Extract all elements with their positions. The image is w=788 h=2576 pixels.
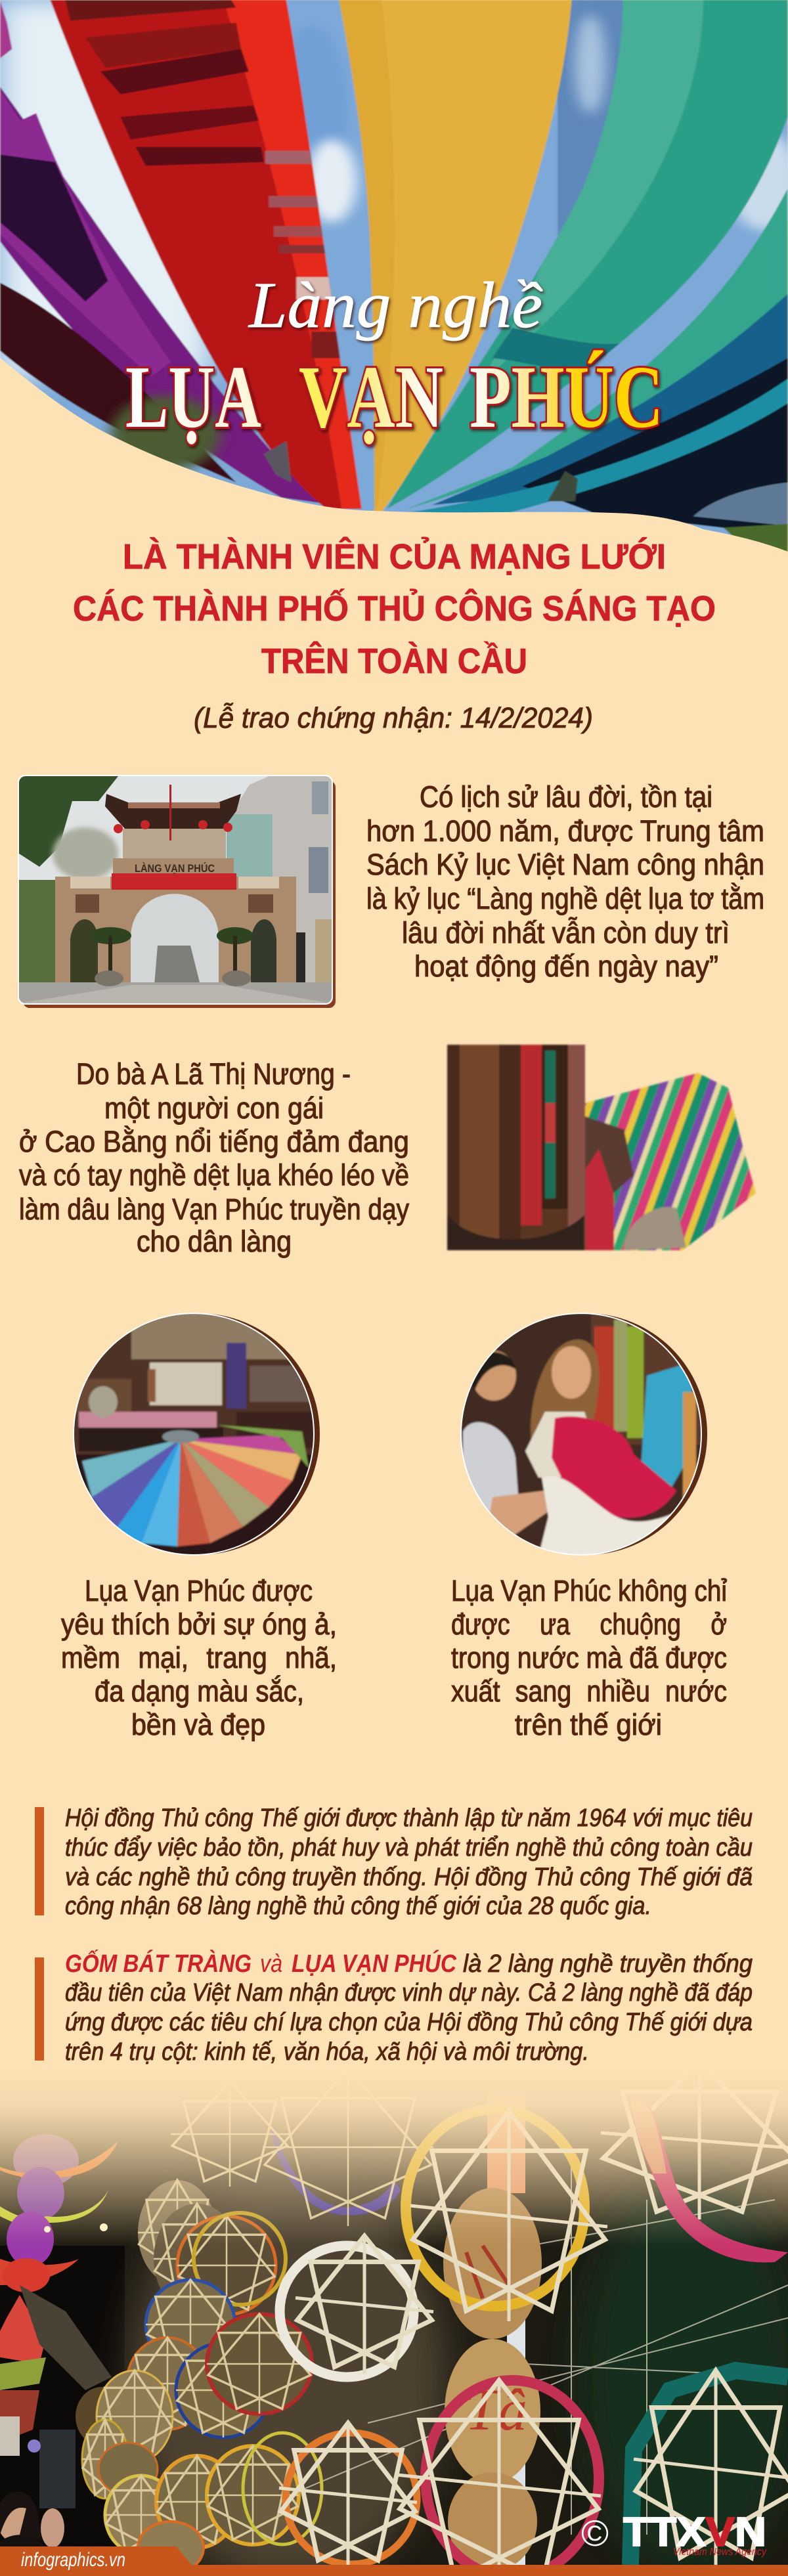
text: founder of the craft: một người con gái [104,1091,324,1125]
photo: Vạn Phúc village gate: LÀNG VẠN PHÚC [135,862,215,875]
pink silk hank [630,2098,788,2263]
red ribbon [50,0,362,509]
shop lights and passer-by [0,2416,76,2546]
lower-right ribbons [407,188,788,509]
note: Bát Tràng and Vạn Phúc recognised: và [260,1950,282,1978]
photo: customers choosing silk [460,1313,707,1557]
photo: Vạn Phúc village gate [18,775,336,1008]
crimson silk star frame [397,2380,601,2576]
hero photo: silk ribbons against the sky [0,0,788,565]
text: domestic and export popularity: Lụa Vạn Phúc không chỉ [451,1574,727,1607]
text: history of the village: lâu đời nhất vẫn còn duy trì [402,916,730,950]
red silk cloth [552,1416,676,1517]
note: Bát Tràng and Vạn Phúc recognised: trên 4 trụ cột: kinh tế, văn hóa, xã hội và môi trường. [65,2038,589,2066]
title line: Lụa Vạn Phúc [125,348,663,447]
basket trays [443,2188,542,2571]
title line: Làng nghề: Làng nghề [248,269,543,341]
basket trays: Tâ [465,2378,527,2443]
bottom orange bar with source tab [0,2546,788,2576]
text: qualities of Vạn Phúc silk: mềm mại, trang nhã, [61,1641,337,1674]
text: qualities of Vạn Phúc silk: đa dạng màu sắc, [95,1674,304,1708]
note: Bát Tràng and Vạn Phúc recognised: là 2 làng nghề truyền thống [463,1950,753,1978]
yellow ribbon [339,0,572,512]
teal silk star frame [630,2370,788,2567]
title line: Lụa Vạn Phúc: VẠN [299,348,443,447]
note: World Crafts Council: công nhận 68 làng nghề thủ công thế giới của 28 quốc gia. [65,1892,651,1920]
text: history of the village: hơn 1.000 năm, được Trung tâm [366,814,764,848]
green ribbon upper [387,0,788,509]
text: history of the village: hoạt động đến ngày nay” [414,950,718,983]
tree trunk [20,2285,112,2390]
note: Bát Tràng and Vạn Phúc recognised [35,1948,753,2066]
text: history of the village [366,780,764,983]
gate arches [131,894,219,988]
right-side buildings [227,776,332,1003]
white silk cloth [539,1476,671,1554]
note: World Crafts Council: và các nghề thủ công truyền thống. Hội đồng Thủ công Thế giới đã [65,1864,753,1891]
text: domestic and export popularity [451,1574,727,1741]
text: founder of the craft: và có tay nghề dệt lụa khéo léo về [19,1158,409,1192]
white silk star frame [280,2236,433,2377]
dark maroon ribbon [0,282,236,483]
heading: CÁC THÀNH PHỐ THỦ CÔNG SÁNG TẠO [73,588,716,628]
trees [19,776,118,867]
left purple ribbon [0,87,322,503]
text: history of the village: Có lịch sử lâu đời, tồn tại [420,780,712,814]
text: qualities of Vạn Phúc silk: yêu thích bởi sự óng ả, [61,1607,337,1641]
bottom photo: silk-wound star frames at night [0,2062,788,2576]
text: founder of the craft [19,1057,409,1258]
shopper in striped top [471,1351,516,1401]
text: founder of the craft: Do bà A Lã Thị Nương - [76,1057,351,1091]
upper star frames [263,2105,433,2226]
date note: (Lễ trao chứng nhận: 14/2/2024) [194,702,593,734]
heading: TRÊN TOÀN CẦU [261,641,527,681]
text: domestic and export popularity: trong nước mà đã được [451,1641,727,1674]
heading [73,536,716,681]
text: founder of the craft: cho dân làng [137,1225,292,1258]
note: Bát Tràng and Vạn Phúc recognised: LỤA VẠN PHÚC [292,1949,456,1978]
text: qualities of Vạn Phúc silk: Lụa Vạn Phúc được [85,1574,313,1607]
title line: Lụa Vạn Phúc: LỤA [125,348,261,447]
text: qualities of Vạn Phúc silk [61,1574,337,1741]
photo: loom and striped silk [447,1045,756,1250]
title line: Lụa Vạn Phúc: PHÚC [470,348,663,447]
trail of small star frames [76,2180,322,2574]
text: history of the village: Sách Kỷ lục Việt Nam công nhận [366,848,764,881]
note: World Crafts Council [35,1804,753,1920]
hanging paper lanterns [0,2134,118,2443]
photo: silk shop [72,1313,320,1560]
fade into page background [0,2068,788,2246]
striped silk cloth [585,1073,756,1250]
purple silk ribbon [271,2128,401,2216]
gate tower and roof [105,794,241,829]
logo: TTXVN copyright: TTXVN [623,2510,766,2555]
title [125,269,663,447]
logo: TTXVN copyright: Vietnam News Agency [673,2546,767,2558]
logo: TTXVN copyright: © [581,2512,609,2554]
heading: LÀ THÀNH VIÊN CỦA MẠNG LƯỚI [123,536,666,577]
text: domestic and export popularity: trên thế giới [515,1708,662,1741]
text: qualities of Vạn Phúc silk: bền và đẹp [131,1708,265,1741]
orange silk star frame [279,2423,417,2567]
text: domestic and export popularity: được ưa chuộng ở [451,1607,727,1641]
fan of folded silk [82,1425,309,1546]
text: founder of the craft: làm dâu làng Vạn Phúc truyền dạy [19,1192,409,1226]
yellow silk star frame [406,2109,607,2321]
note: Bát Tràng and Vạn Phúc recognised: GỐM BÁT TRÀNG [65,1948,252,1978]
shopper with long hair [529,1338,600,1439]
source: infographics.vn: infographics.vn [21,2549,125,2571]
hanging strings [289,2167,788,2535]
text: domestic and export popularity: xuất sang nhiều nước [451,1674,727,1708]
text: founder of the craft: ở Cao Bằng nổi tiếng đảm đang [19,1125,409,1158]
